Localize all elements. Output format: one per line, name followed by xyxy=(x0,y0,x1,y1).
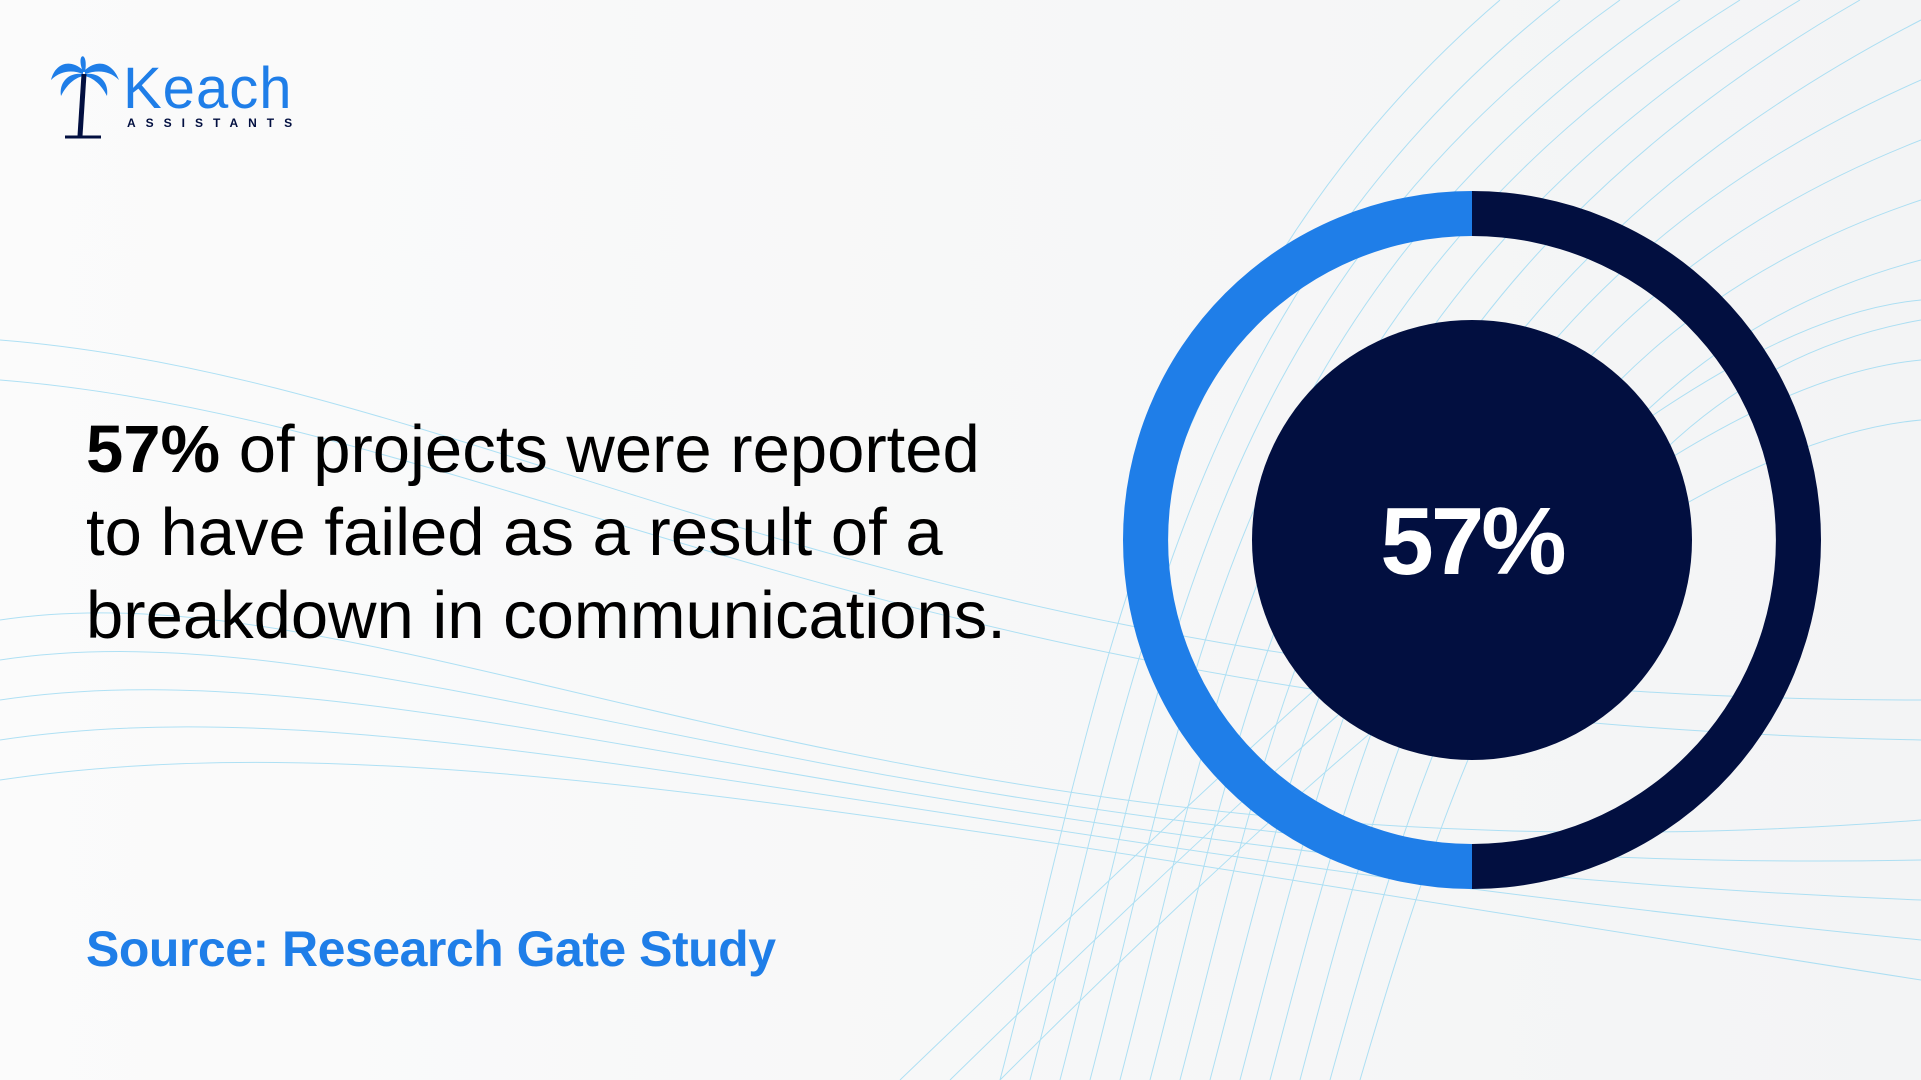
source: Source: Research Gate Study xyxy=(86,921,776,977)
donut chart xyxy=(1123,191,1821,889)
headline text xyxy=(86,412,1006,653)
headline text: 57% of projects were reported xyxy=(86,412,980,487)
logo: ASSISTANTS xyxy=(127,116,302,130)
logo xyxy=(51,56,302,138)
donut chart: 57% xyxy=(1380,488,1564,595)
logo text: Keach xyxy=(123,56,292,121)
headline text: breakdown in communications. xyxy=(86,578,1006,653)
headline text: to have failed as a result of a xyxy=(86,495,943,570)
icon: palm tree xyxy=(51,56,119,138)
